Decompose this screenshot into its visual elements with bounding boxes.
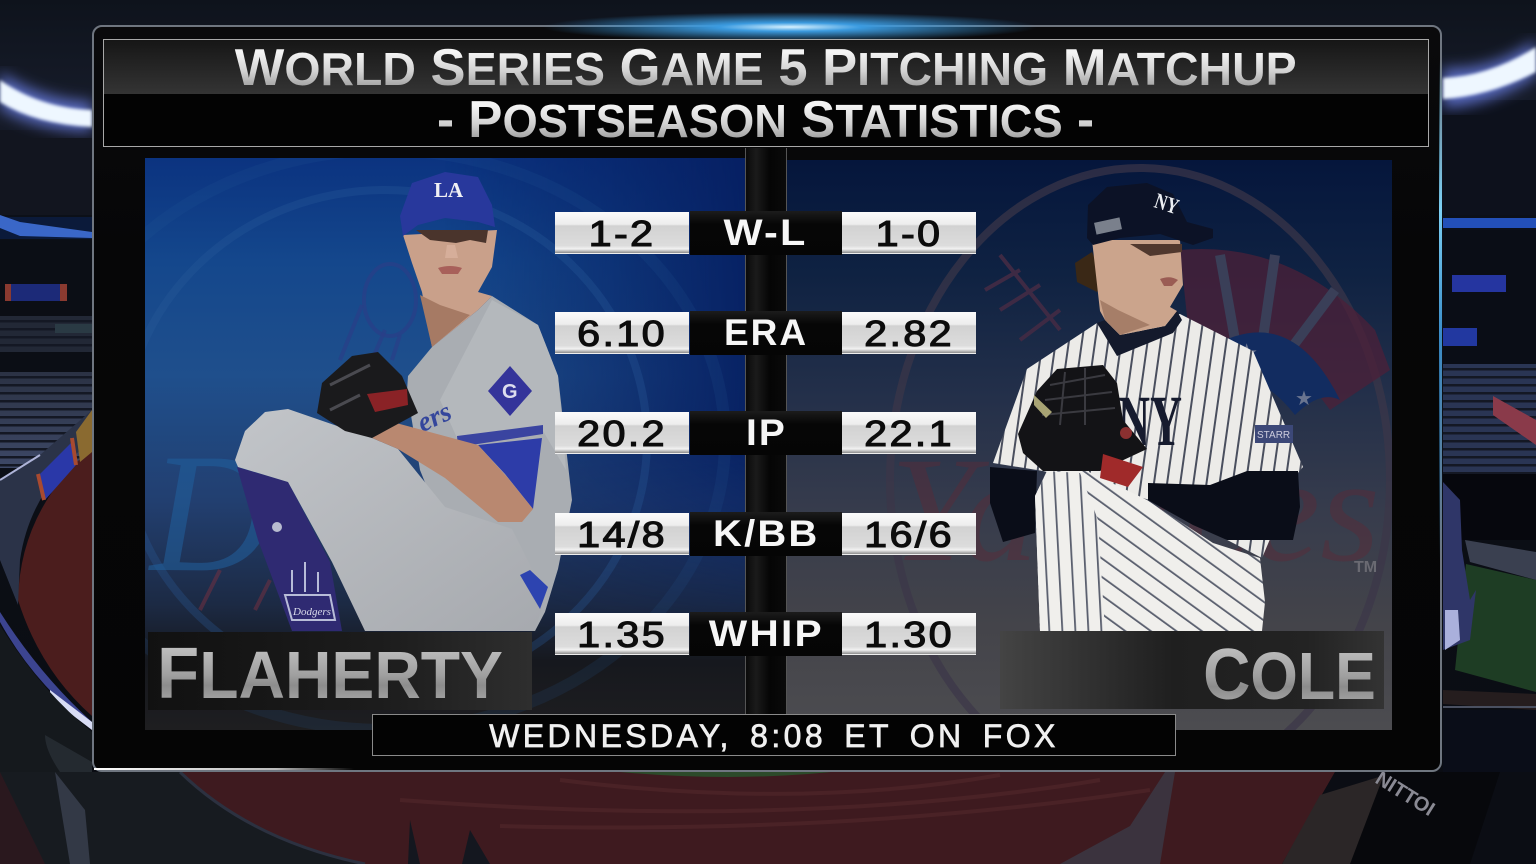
eye shadow and mouth bbox=[416, 230, 488, 243]
Yankees logo watermark: ★ bbox=[1235, 339, 1258, 369]
right stands bbox=[1443, 100, 1536, 215]
glove bbox=[317, 352, 418, 438]
sleeve patch bbox=[1255, 425, 1293, 443]
stat row: WHIP: 1.35 bbox=[577, 614, 667, 655]
bottom right fence and wall bbox=[1282, 772, 1536, 864]
name plate: Cole: COLE bbox=[1203, 635, 1376, 715]
stat row: WHIP: WHIP bbox=[708, 613, 824, 654]
LA logo: LA bbox=[434, 178, 464, 202]
forearm bbox=[372, 420, 533, 522]
stat row: IP: 20.2 bbox=[577, 413, 667, 454]
stat row: ERA: ERA bbox=[724, 312, 808, 353]
bottom airtime bar bbox=[372, 714, 1176, 756]
left undershirt bbox=[990, 467, 1037, 542]
Yankees logo watermark: ★ bbox=[1295, 386, 1313, 410]
stat row: K/BB: 16/6 bbox=[864, 514, 954, 555]
cap bbox=[1087, 183, 1213, 245]
right light bbox=[1443, 40, 1536, 108]
stat row: K/BB: 14/8 bbox=[577, 514, 667, 555]
jersey bbox=[993, 314, 1303, 558]
wrist strap bbox=[1100, 454, 1143, 487]
bottom left fence and walkway bbox=[0, 772, 365, 864]
collar bbox=[1097, 311, 1182, 356]
left dirt, fence bbox=[18, 448, 92, 716]
frame bottom highlight bbox=[94, 768, 354, 770]
hair bbox=[1075, 252, 1104, 292]
center strip bbox=[745, 148, 787, 714]
title block bbox=[103, 39, 1429, 147]
title line 2: - POSTSEASON STATISTICS - bbox=[437, 91, 1095, 149]
sock bbox=[237, 467, 342, 631]
bottom dirt bbox=[180, 772, 1335, 864]
player: Flaherty bbox=[235, 172, 572, 631]
stat row: WHIP: 1.30 bbox=[864, 614, 954, 655]
sleeve patch bbox=[488, 366, 532, 416]
top blue glow bbox=[540, 12, 1040, 42]
stat row: W-L: 1-0 bbox=[876, 213, 942, 254]
name plate: Cole bbox=[1000, 631, 1384, 709]
stat row: ERA: 6.10 bbox=[577, 313, 667, 354]
Yankees logo watermark: TM bbox=[1354, 559, 1377, 576]
name plate: Flaherty: FLAHERTY bbox=[157, 634, 503, 714]
head and neck bbox=[403, 230, 497, 347]
stat row: IP: 22.1 bbox=[864, 413, 954, 454]
right sleeve bbox=[1148, 471, 1300, 540]
Yankees logo watermark: Yankees bbox=[890, 427, 1380, 593]
jersey script: ers bbox=[412, 396, 457, 439]
face details bbox=[1130, 244, 1182, 256]
darker blue toward center bbox=[502, 158, 745, 570]
sleeve trim bbox=[457, 425, 543, 447]
stat row: ERA: 2.82 bbox=[864, 313, 954, 354]
player: Cole bbox=[990, 183, 1303, 631]
panel: Yankees side bbox=[787, 160, 1392, 730]
chest NY: NY bbox=[1118, 381, 1182, 461]
main frame panel bbox=[92, 25, 1442, 772]
NY logo: NY bbox=[1152, 188, 1182, 219]
stat row: W-L: W-L bbox=[724, 212, 808, 253]
Yankees logo watermark bbox=[886, 164, 1392, 730]
stat row: K/BB: K/BB bbox=[713, 513, 819, 554]
player: Cole: STARR bbox=[1257, 430, 1290, 441]
stadium background: NITTOI bbox=[1371, 768, 1438, 821]
jersey bbox=[407, 296, 572, 631]
panel: Dodgers side bbox=[145, 158, 745, 730]
pants bbox=[1035, 471, 1265, 631]
player: Flaherty: Dodgers bbox=[292, 606, 331, 618]
glove bbox=[1018, 365, 1147, 471]
blue undersleeve bbox=[478, 438, 542, 509]
title line 1: WORLD SERIES GAME 5 PITCHING MATCHUP bbox=[235, 39, 1297, 97]
left light bbox=[0, 72, 92, 132]
cap bbox=[400, 172, 495, 236]
player: Flaherty: G bbox=[502, 381, 518, 403]
pants bbox=[235, 409, 548, 631]
frame right edge blue glow bbox=[1439, 60, 1442, 560]
Dodgers logo watermark bbox=[145, 186, 703, 730]
bottom airtime bar: WEDNESDAY, 8:08 ET ON FOX bbox=[489, 718, 1059, 754]
stat row: W-L: 1-2 bbox=[589, 213, 655, 254]
left stands bbox=[0, 130, 92, 215]
head and neck bbox=[1092, 240, 1183, 335]
stat row: IP: IP bbox=[746, 412, 786, 453]
title line 1 background bbox=[104, 40, 1428, 94]
Dodgers logo watermark: D bbox=[148, 419, 273, 607]
